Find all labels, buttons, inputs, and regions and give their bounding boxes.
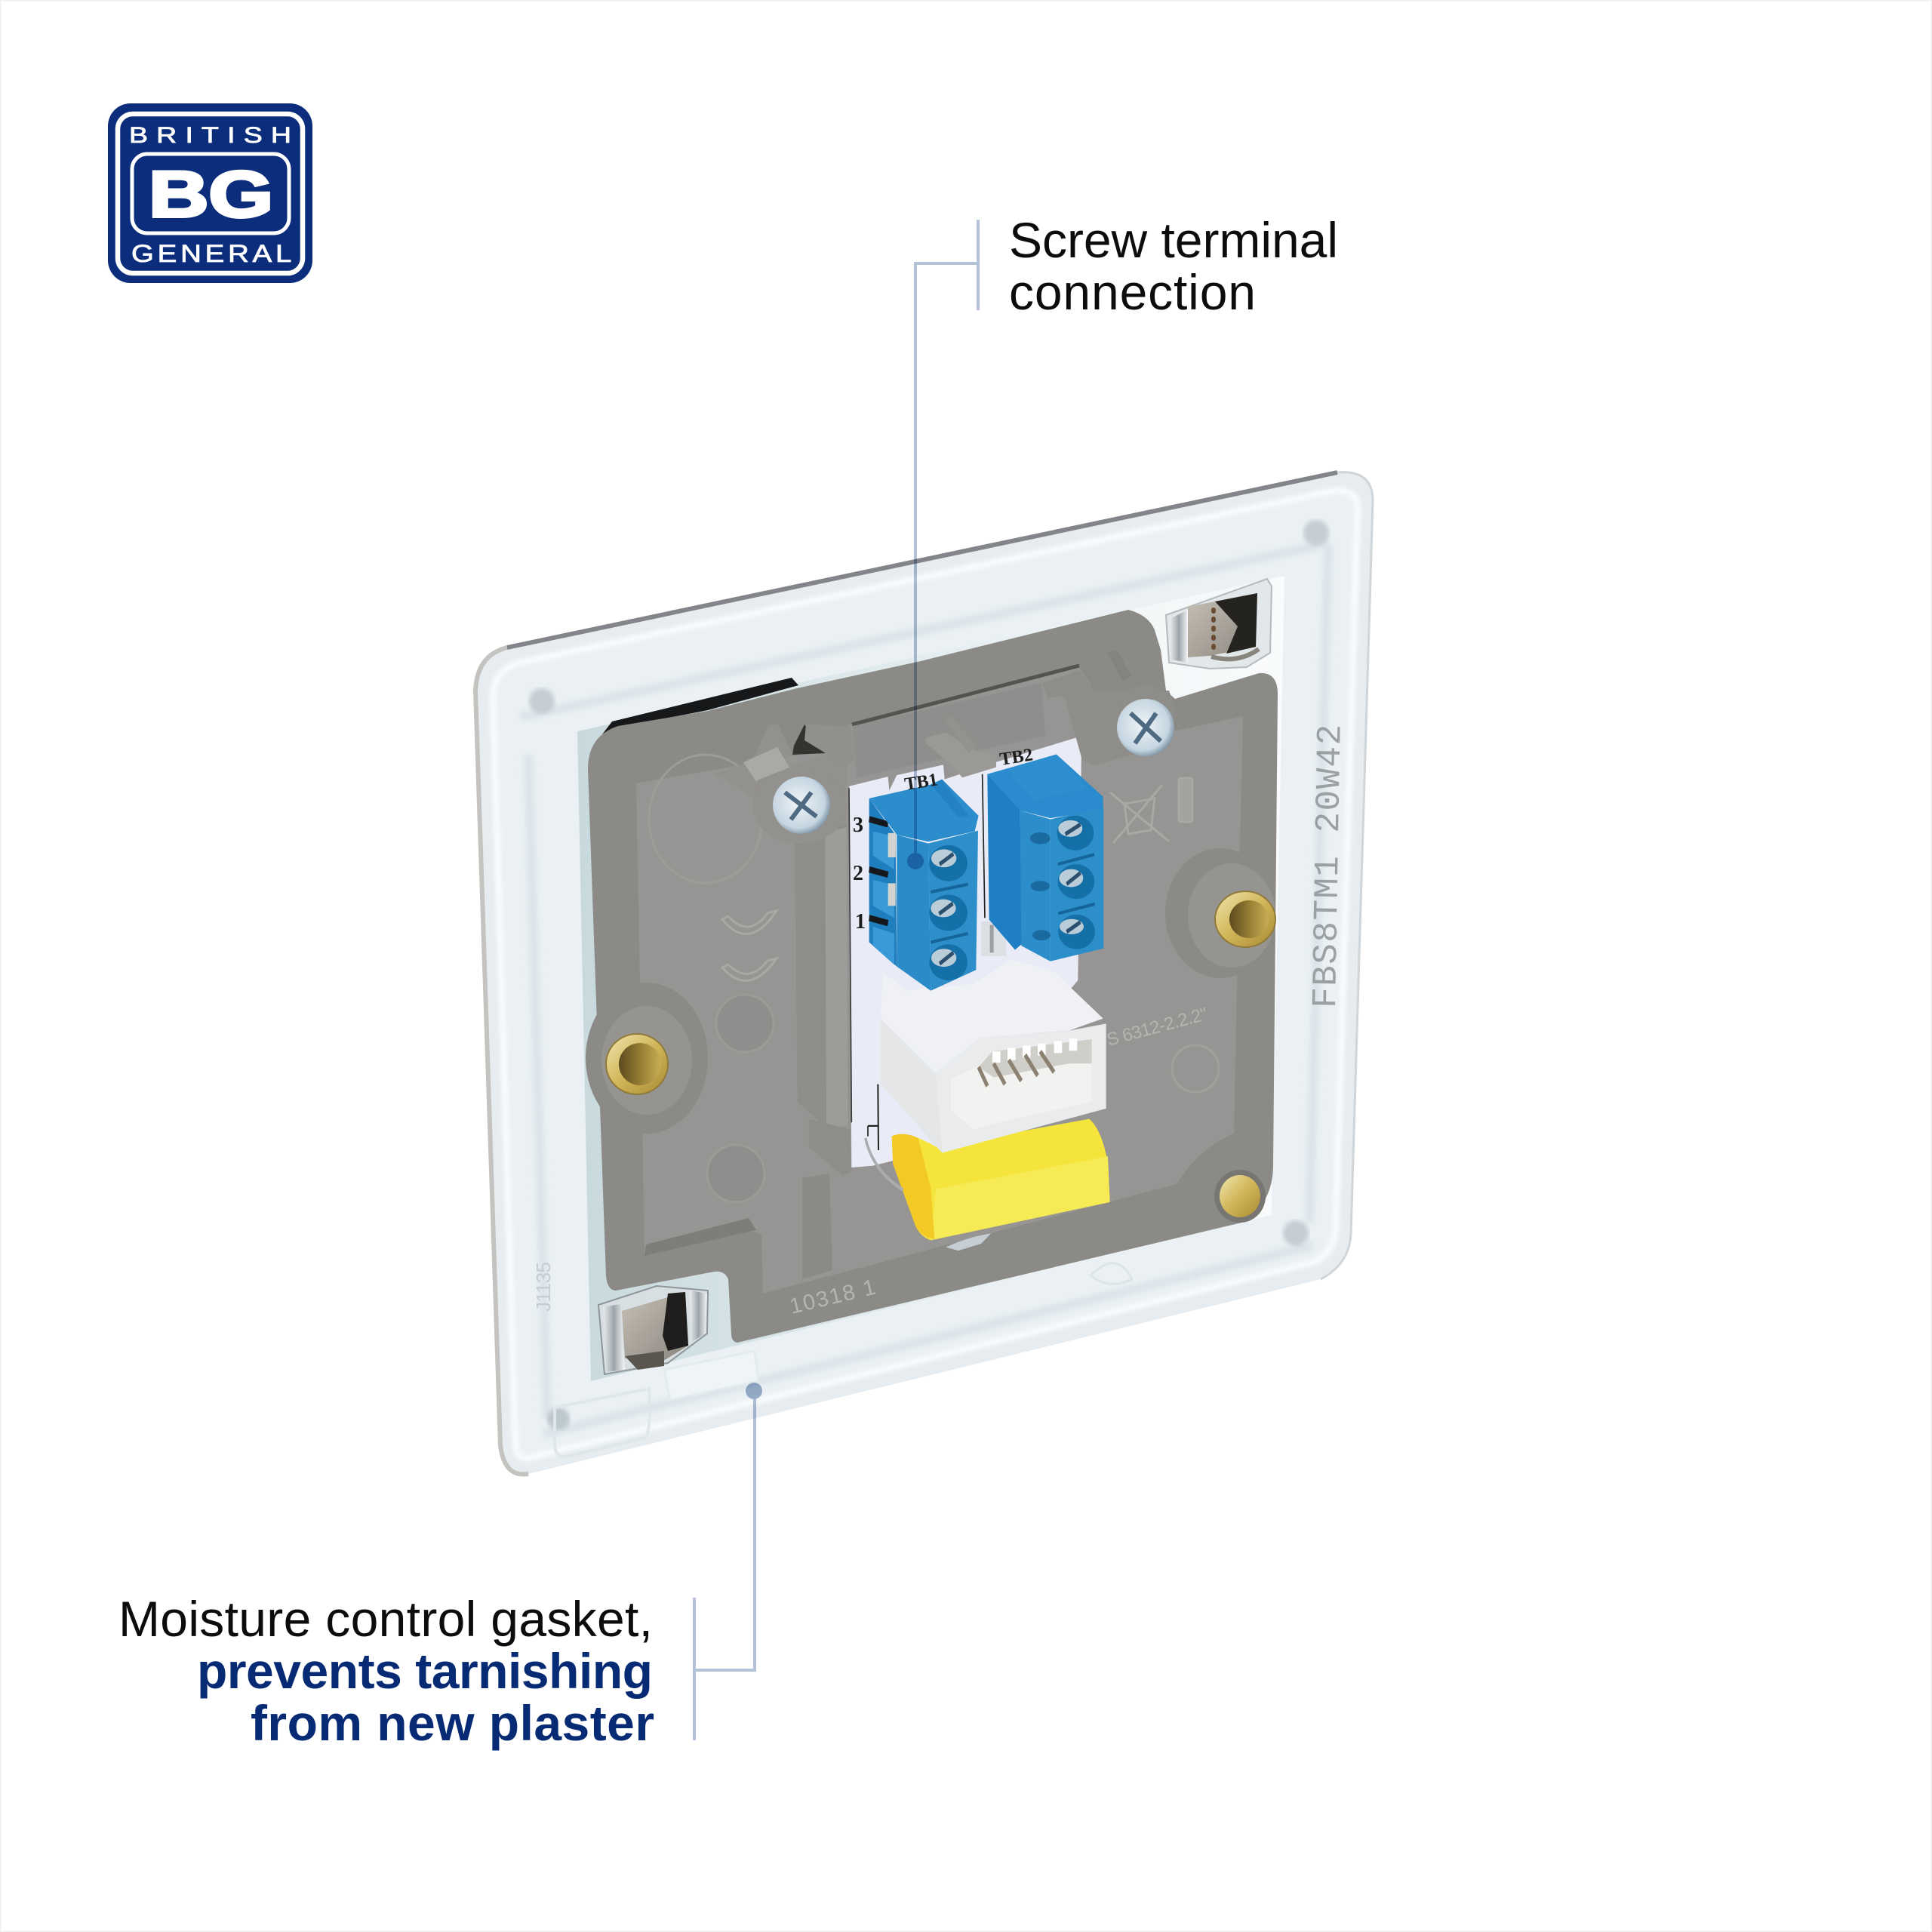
metal lug: bottom left bbox=[598, 1286, 708, 1374]
product photo: socket back plate bbox=[475, 472, 1373, 1475]
callout text: moisture control gasket: prevents tarnishing bbox=[197, 1643, 653, 1699]
printed marking: terminal 1: 1 bbox=[855, 910, 866, 934]
callout leader: moisture gasket bbox=[694, 1383, 762, 1740]
callout text: screw terminal connection bbox=[1009, 212, 1338, 320]
printed marking: TB1: TB1 bbox=[903, 770, 939, 795]
plate code: FBS8TM1 20W42: FBS8TM1 20W42 bbox=[1306, 724, 1351, 1008]
screw terminal block TB1 bbox=[869, 780, 979, 991]
logo: British General: BRITISH bbox=[129, 122, 291, 148]
moulded standard: BS 6312: S 6312-2.2.2" bbox=[1105, 1004, 1210, 1051]
callout text: moisture control gasket bbox=[118, 1591, 654, 1751]
bracket and mounting screws bbox=[715, 650, 1177, 844]
moulded marks: CE, circles and disposal symbol bbox=[649, 755, 1219, 1202]
callout text: moisture control gasket: from new plaster bbox=[251, 1695, 654, 1751]
plate and gasket: J1135 bbox=[532, 1262, 555, 1312]
printed marking: terminal 2: 2 bbox=[853, 862, 863, 885]
logo: British General bbox=[108, 103, 312, 283]
yellow capacitor bbox=[866, 1119, 1110, 1251]
printed marking: TB2: TB2 bbox=[998, 745, 1034, 770]
callout leader: screw terminal bbox=[907, 220, 978, 869]
screw terminal block TB2 bbox=[987, 755, 1103, 961]
printed marking: terminal 3: 3 bbox=[853, 814, 863, 837]
callout text: screw terminal connection: Screw terminal bbox=[1009, 212, 1338, 268]
logo: British General: BG bbox=[149, 158, 273, 231]
grey moulded body bbox=[586, 610, 1278, 1343]
plate and gasket bbox=[475, 472, 1373, 1475]
callout text: screw terminal connection: connection bbox=[1009, 264, 1256, 320]
circuit board and pillar bbox=[795, 717, 1081, 1176]
logo: British General: GENERAL bbox=[131, 241, 291, 267]
metal lug: top right bbox=[1166, 579, 1272, 669]
moulded code: 10318 1: 10318 1 bbox=[787, 1275, 878, 1319]
callout text: moisture control gasket: Moisture control gasket, bbox=[118, 1591, 653, 1647]
telephone socket module bbox=[881, 959, 1106, 1153]
brass screw holes bbox=[606, 891, 1275, 1217]
